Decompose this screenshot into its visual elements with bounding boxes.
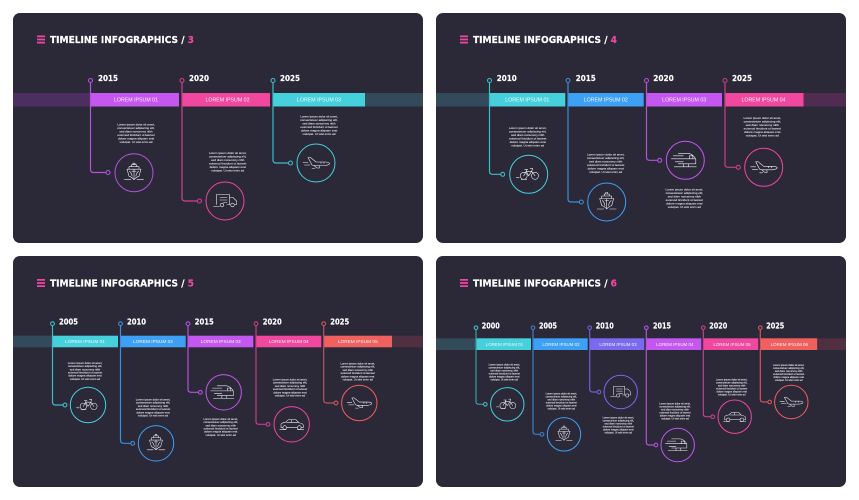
step: 2020 truck: volutpat. Ut wisi enim ad <box>211 168 245 172</box>
step: 2005 bicycle: volutpat. Ut wisi enim ad <box>70 377 101 381</box>
step: 2025 plane: sed diam nonummy nibh <box>302 122 336 126</box>
step: 2025 plane: Lorem ipsum dolor sit amet, <box>300 114 338 118</box>
step: 2000 bicycle: volutpat. Ut wisi enim ad <box>490 377 519 381</box>
step: 2015 ship: euismod tincidunt ut laoreet <box>117 133 155 137</box>
step: 2015 train: volutpat. Ut wisi enim ad <box>661 416 689 420</box>
step: 2020 car: Lorem ipsum dolor sit amet, <box>273 378 307 382</box>
step: 2015 ship: Lorem ipsum dolor sit amet, <box>117 122 155 126</box>
step: 2025 plane: consectetuer adipiscing elit, <box>300 118 338 122</box>
step: 2020 car <box>702 322 751 433</box>
step: 2025 plane: consectetuer adipiscing elit, <box>773 366 805 370</box>
step: 2000 bicycle: consectetuer adipiscing elit, <box>489 365 520 369</box>
step: 2005 ship: euismod tincidunt ut laoreet <box>546 400 577 404</box>
step: 2015 train: 2015 <box>653 322 671 330</box>
timeline bar: LOREM IPSUM 04 <box>741 98 786 104</box>
step: 2020 truck: consectetuer adipiscing elit, <box>209 154 247 158</box>
step: 2015 train: consectetuer adipiscing elit, <box>659 404 691 408</box>
step: 2010 truck: 2010 <box>596 322 614 330</box>
step: 2015 train: sed diam nonummy nibh <box>205 423 236 427</box>
step: 2025 plane: Lorem ipsum dolor sit amet, <box>773 363 805 367</box>
step: 2025 plane: volutpat. Ut wisi enim ad <box>775 378 803 382</box>
timeline bar: LOREM IPSUM 01 <box>65 339 105 345</box>
step: 2015 ship: 2015 <box>576 74 596 83</box>
step: 2015 ship: consectetuer adipiscing elit, <box>117 126 155 130</box>
step: 2015 train <box>186 317 241 437</box>
step: 2010 bicycle: 2010 <box>497 74 517 83</box>
step: 2020 train: consectetuer adipiscing elit, <box>666 191 703 195</box>
step: 2005 bicycle: 2005 <box>59 317 78 326</box>
step: 2000 bicycle: dolore magna aliquam erat <box>489 374 520 378</box>
step: 2020 truck: Lorem ipsum dolor sit amet, <box>209 151 247 155</box>
step: 2020 train: euismod tincidunt ut laoreet <box>666 198 703 202</box>
step: 2015 ship: volutpat. Ut wisi enim ad <box>589 170 623 174</box>
step: 2015 train: Lorem ipsum dolor sit amet, <box>203 417 238 421</box>
step: 2000 bicycle <box>474 322 524 421</box>
step: 2015 ship <box>88 74 155 192</box>
step: 2005 ship: Lorem ipsum dolor sit amet, <box>546 391 577 395</box>
step: 2020 car: dolore magna aliquam erat <box>273 390 307 394</box>
step: 2020 car: volutpat. Ut wisi enim ad <box>275 394 306 398</box>
step: 2020 car: 2020 <box>709 322 728 330</box>
title: infographics 5: TIMELINE INFOGRAPHICS / 5 <box>50 278 194 289</box>
step: 2025 plane: euismod tincidunt ut laoreet <box>744 126 781 130</box>
step: 2010 bicycle: dolore magna aliquam erat <box>510 140 546 144</box>
step: 2025 plane <box>758 322 808 419</box>
step: 2000 bicycle: euismod tincidunt ut laoreet <box>489 371 520 375</box>
step: 2015 ship: volutpat. Ut wisi enim ad <box>119 140 153 144</box>
step: 2010 ship: sed diam nonummy nibh <box>138 404 169 408</box>
step: 2015 train: volutpat. Ut wisi enim ad <box>206 433 236 437</box>
timeline bar: LOREM IPSUM 03 <box>662 98 706 104</box>
step: 2015 ship: sed diam nonummy nibh <box>589 159 623 163</box>
step: 2010 bicycle <box>488 74 548 193</box>
step: 2010 truck: euismod tincidunt ut laoreet <box>603 424 634 428</box>
step: 2020 car: volutpat. Ut wisi enim ad <box>718 393 746 397</box>
step: 2010 bicycle: consectetuer adipiscing elit, <box>509 130 547 134</box>
step: 2005 bicycle: sed diam nonummy nibh <box>70 367 101 371</box>
step: 2005 ship: volutpat. Ut wisi enim ad <box>547 406 576 410</box>
step: 2010 truck: sed diam nonummy nibh <box>604 421 633 425</box>
step: 2010 truck: consectetuer adipiscing elit, <box>603 418 634 422</box>
timeline bar: LOREM IPSUM 02 <box>584 98 628 104</box>
step: 2020 train: Lorem ipsum dolor sit amet, <box>666 187 703 191</box>
step: 2025 plane: sed diam nonummy nibh <box>746 123 779 127</box>
step: 2010 ship: dolore magna aliquam erat <box>136 410 170 414</box>
timeline bar: LOREM IPSUM 05 <box>713 342 751 347</box>
timeline bar: LOREM IPSUM 04 <box>656 342 694 347</box>
step: 2025 plane: dolore magna aliquam erat <box>744 130 781 134</box>
step: 2015 train: sed diam nonummy nibh <box>661 407 689 411</box>
step: 2025 plane: sed diam nonummy nibh <box>775 369 803 373</box>
step: 2010 bicycle: euismod tincidunt ut laoreet <box>509 136 546 140</box>
panel: timeline with 6 steps <box>436 256 846 487</box>
step: 2020 train: volutpat. Ut wisi enim ad <box>668 205 701 209</box>
step: 2020 train: sed diam nonummy nibh <box>668 194 701 198</box>
step: 2015 train: Lorem ipsum dolor sit amet, <box>659 401 691 405</box>
step: 2020 car <box>254 317 309 442</box>
step: 2020 truck: 2020 <box>189 74 209 83</box>
step: 2020 car: sed diam nonummy nibh <box>718 384 746 388</box>
step: 2020 car: Lorem ipsum dolor sit amet, <box>716 378 748 382</box>
step: 2025 plane: sed diam nonummy nibh <box>342 368 373 372</box>
step: 2025 plane: euismod tincidunt ut laoreet <box>773 372 805 376</box>
step: 2025 plane: 2025 <box>766 322 785 330</box>
step: 2010 truck: Lorem ipsum dolor sit amet, <box>603 415 634 419</box>
step: 2025 plane: dolore magna aliquam erat <box>341 374 375 378</box>
timeline bar: LOREM IPSUM 06 <box>771 342 808 347</box>
step: 2010 bicycle: volutpat. Ut wisi enim ad <box>511 144 545 148</box>
step: 2025 plane: 2025 <box>280 74 300 83</box>
timeline bar: LOREM IPSUM 03 <box>599 342 637 347</box>
timeline bar <box>436 338 846 350</box>
step: 2015 ship: dolore magna aliquam erat <box>588 166 624 170</box>
step: 2015 train: consectetuer adipiscing elit, <box>204 420 238 424</box>
step: 2025 plane: volutpat. Ut wisi enim ad <box>746 134 779 138</box>
step: 2020 car: consectetuer adipiscing elit, <box>716 381 748 385</box>
step: 2025 plane: Lorem ipsum dolor sit amet, <box>744 116 781 120</box>
step: 2020 truck: dolore magna aliquam erat <box>210 165 246 169</box>
timeline bar: LOREM IPSUM 02 <box>542 342 580 347</box>
step: 2025 plane <box>723 74 783 186</box>
step: 2005 bicycle: consectetuer adipiscing elit, <box>68 364 102 368</box>
step: 2015 ship: Lorem ipsum dolor sit amet, <box>587 152 625 156</box>
step: 2025 plane: dolore magna aliquam erat <box>774 375 804 379</box>
step: 2025 plane: volutpat. Ut wisi enim ad <box>343 378 373 382</box>
step: 2025 plane: consectetuer adipiscing elit, <box>744 120 781 124</box>
step: 2025 plane: euismod tincidunt ut laoreet <box>300 125 338 129</box>
step: 2025 plane <box>271 74 338 182</box>
step: 2010 ship: Lorem ipsum dolor sit amet, <box>136 398 170 402</box>
step: 2020 car: euismod tincidunt ut laoreet <box>273 387 307 391</box>
timeline bar <box>13 336 423 347</box>
step: 2015 train: 2015 <box>195 317 214 326</box>
timeline bar: LOREM IPSUM 02 <box>205 98 250 104</box>
step: 2020 car: 2020 <box>263 317 282 326</box>
panel: timeline with 3 steps <box>13 13 423 243</box>
step: 2015 ship: euismod tincidunt ut laoreet <box>587 163 624 167</box>
step: 2015 train: euismod tincidunt ut laoreet <box>204 426 238 430</box>
step: 2005 bicycle: Lorem ipsum dolor sit amet, <box>68 361 102 365</box>
step: 2025 plane: volutpat. Ut wisi enim ad <box>302 132 336 136</box>
step: 2005 bicycle <box>51 317 106 423</box>
panel: timeline with 4 steps <box>436 13 846 243</box>
panel: timeline with 5 steps <box>13 256 423 487</box>
step: 2020 train: 2020 <box>653 74 674 83</box>
step: 2010 ship: 2010 <box>127 317 146 326</box>
timeline bar: LOREM IPSUM 03 <box>201 339 241 345</box>
step: 2025 plane: consectetuer adipiscing elit, <box>341 365 375 369</box>
step: 2015 train: dolore magna aliquam erat <box>660 413 690 417</box>
timeline bar: LOREM IPSUM 02 <box>133 339 173 345</box>
step: 2010 truck: volutpat. Ut wisi enim ad <box>604 430 633 434</box>
timeline bar: LOREM IPSUM 03 <box>297 98 341 104</box>
step: 2015 ship: 2015 <box>98 74 118 83</box>
step: 2020 truck: euismod tincidunt ut laoreet <box>209 162 246 166</box>
title: infographics 3: TIMELINE INFOGRAPHICS / 3 <box>50 35 194 46</box>
step: 2005 bicycle: dolore magna aliquam erat <box>68 374 102 378</box>
step: 2010 ship: consectetuer adipiscing elit, <box>136 401 170 405</box>
step: 2010 bicycle: Lorem ipsum dolor sit amet, <box>509 126 547 130</box>
step: 2000 bicycle: 2000 <box>482 322 500 330</box>
step: 2025 plane: Lorem ipsum dolor sit amet, <box>340 362 375 366</box>
timeline bar: LOREM IPSUM 01 <box>505 98 549 104</box>
step: 2020 truck: sed diam nonummy nibh <box>211 158 245 162</box>
step: 2010 truck: dolore magna aliquam erat <box>603 427 634 431</box>
step: 2010 truck <box>588 322 637 434</box>
step: 2020 truck <box>180 74 247 220</box>
step: 2015 train: euismod tincidunt ut laoreet <box>659 410 691 414</box>
step: 2020 car: dolore magna aliquam erat <box>717 390 747 394</box>
step: 2020 train: dolore magna aliquam erat <box>666 201 703 205</box>
step: 2005 ship: sed diam nonummy nibh <box>547 397 576 401</box>
step: 2025 plane: 2025 <box>732 74 752 83</box>
timeline bar: LOREM IPSUM 05 <box>338 339 378 345</box>
step: 2005 ship: 2005 <box>539 322 557 330</box>
step: 2020 car: sed diam nonummy nibh <box>275 384 306 388</box>
step: 2005 ship: consectetuer adipiscing elit, <box>546 394 577 398</box>
step: 2025 plane: dolore magna aliquam erat <box>301 128 337 132</box>
title: infographics 6: TIMELINE INFOGRAPHICS / 6 <box>473 278 617 289</box>
step: 2020 train <box>644 74 704 209</box>
step: 2020 car: euismod tincidunt ut laoreet <box>716 387 748 391</box>
step: 2010 ship: euismod tincidunt ut laoreet <box>136 407 170 411</box>
step: 2005 bicycle: euismod tincidunt ut laoreet <box>68 370 102 374</box>
title: infographics 4: TIMELINE INFOGRAPHICS / 4 <box>473 35 617 46</box>
step: 2015 ship: consectetuer adipiscing elit, <box>587 156 625 160</box>
timeline bar: LOREM IPSUM 04 <box>269 339 309 345</box>
step: 2015 ship: dolore magna aliquam erat <box>118 136 154 140</box>
step: 2025 plane <box>322 317 377 421</box>
step: 2010 ship: volutpat. Ut wisi enim ad <box>138 414 169 418</box>
step: 2000 bicycle: Lorem ipsum dolor sit amet, <box>489 362 520 366</box>
step: 2015 train <box>644 322 694 462</box>
timeline bar: LOREM IPSUM 01 <box>486 342 524 347</box>
timeline bar: LOREM IPSUM 01 <box>114 98 158 104</box>
step: 2005 ship: dolore magna aliquam erat <box>546 403 577 407</box>
step: 2015 ship: sed diam nonummy nibh <box>119 130 153 134</box>
step: 2015 ship <box>566 74 626 221</box>
step: 2025 plane: 2025 <box>330 317 350 326</box>
step: 2010 bicycle: sed diam nonummy nibh <box>511 133 545 137</box>
step: 2015 train: dolore magna aliquam erat <box>204 430 238 434</box>
step: 2005 ship <box>531 322 581 451</box>
step: 2020 car: consectetuer adipiscing elit, <box>273 381 307 385</box>
step: 2000 bicycle: sed diam nonummy nibh <box>490 368 519 372</box>
timeline bar <box>13 93 423 106</box>
step: 2010 ship <box>119 317 174 461</box>
timeline bar <box>436 93 846 106</box>
step: 2025 plane: euismod tincidunt ut laoreet <box>341 371 375 375</box>
